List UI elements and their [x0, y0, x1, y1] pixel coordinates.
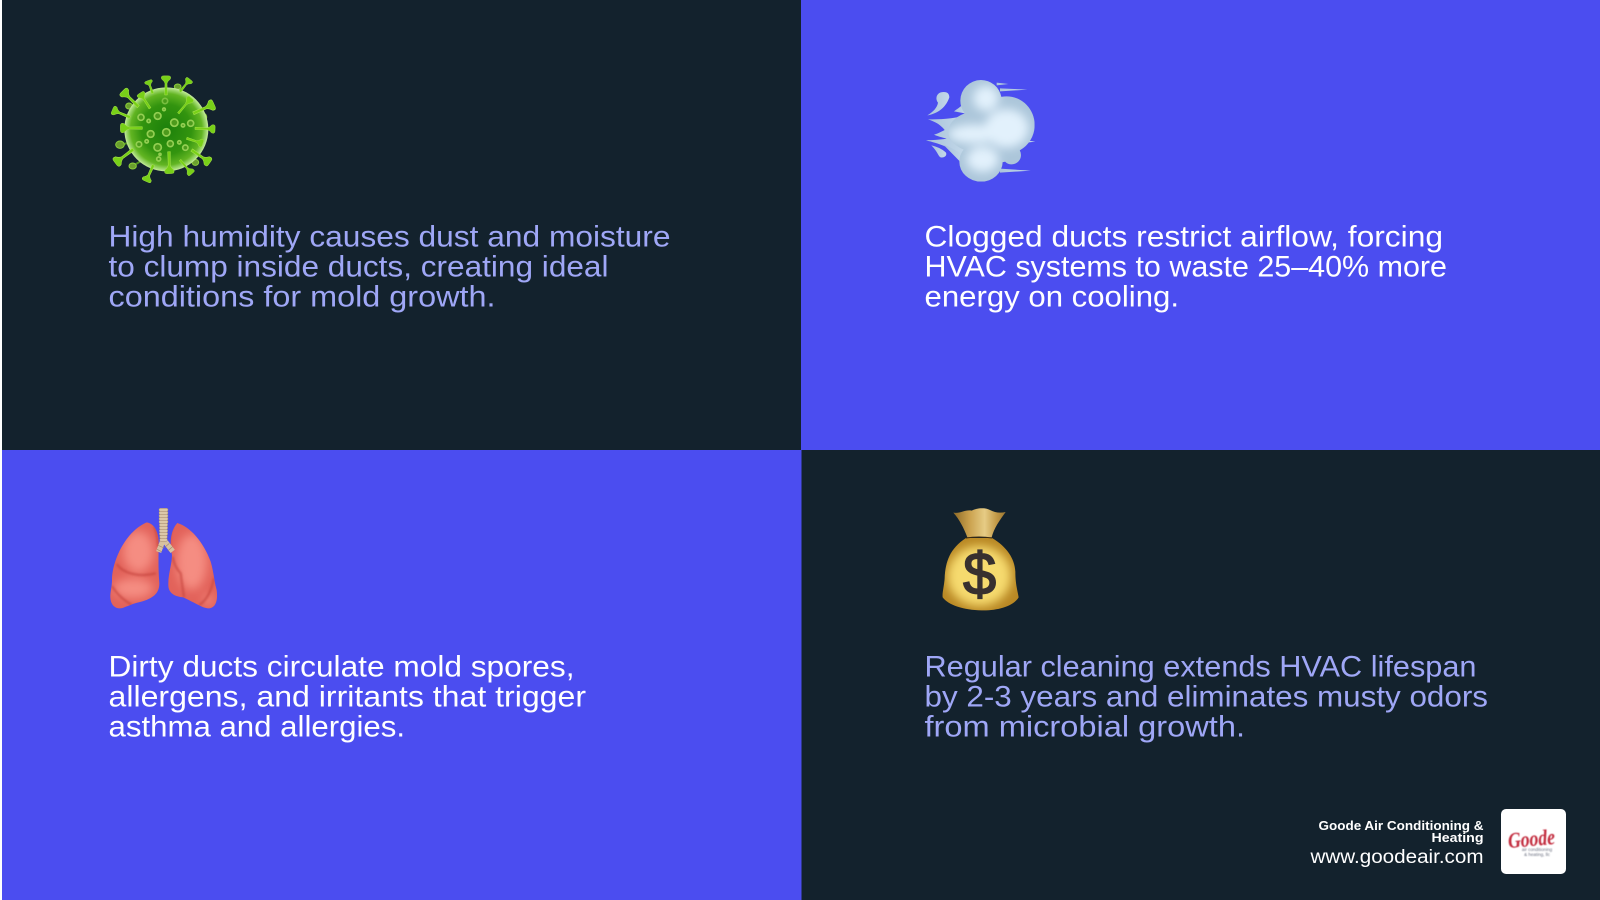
body text: humidity: High humidity causes dust and moisture [108, 221, 670, 254]
body text: lifespan: by 2-3 years and eliminates musty odors [924, 681, 1488, 714]
company name [1318, 818, 1484, 845]
icon: dust cloud [926, 80, 1035, 182]
body text: lifespan [924, 651, 1488, 744]
logo badge: Goode [1507, 824, 1556, 853]
body text: energy waste [924, 221, 1447, 314]
icon: lungs [107, 508, 220, 612]
logo badge [1501, 809, 1566, 874]
body text: asthma and allergies: asthma and allergies. [108, 711, 405, 744]
body text: asthma and allergies: Dirty ducts circulate mold spores, [108, 651, 574, 684]
logo badge: & heating, llc [1524, 852, 1551, 857]
body text: lifespan: from microbial growth. [924, 711, 1245, 744]
panel: cost savings [802, 450, 1600, 900]
body text: lifespan: Regular cleaning extends HVAC lifespan [924, 651, 1476, 684]
panel: restricted airflow [801, 0, 1600, 450]
website url: www.goodeair.com [1309, 847, 1484, 868]
company name: Goode Air Conditioning & [1318, 818, 1484, 833]
body text: asthma and allergies [108, 651, 586, 744]
body text: energy waste: HVAC systems to waste 25–40% more [924, 251, 1447, 284]
body text: energy waste: energy on cooling. [924, 281, 1179, 314]
dollar sign: $ [963, 540, 996, 607]
panel: health effects [2, 450, 802, 900]
company name: Heating [1432, 830, 1484, 845]
body text: energy waste: Clogged ducts restrict airflow, forcing [924, 221, 1443, 254]
panel: mold growth [2, 0, 802, 450]
icon: green virus [111, 76, 216, 183]
body text: humidity [108, 221, 670, 314]
logo badge: air conditioning [1522, 847, 1553, 852]
body text: asthma and allergies: allergens, and irritants that trigger [108, 681, 586, 714]
icon: money bag [940, 508, 1022, 613]
body text: humidity: to clump inside ducts, creating ideal [108, 251, 608, 284]
body text: humidity: conditions for mold growth. [108, 281, 496, 314]
